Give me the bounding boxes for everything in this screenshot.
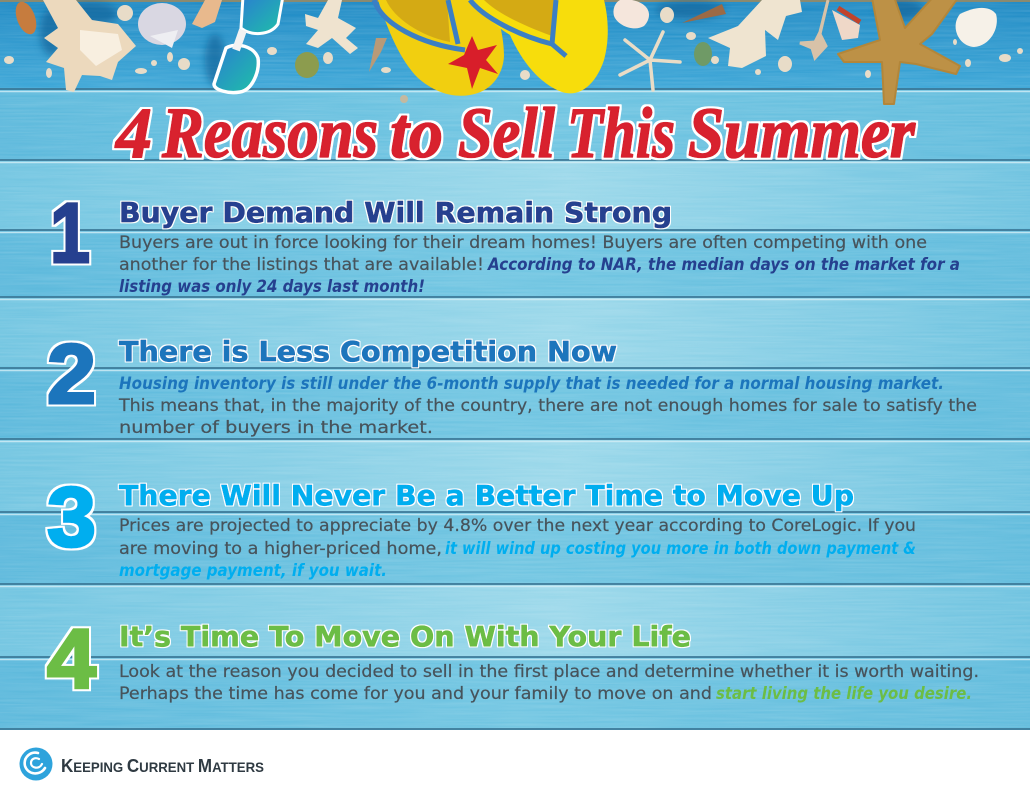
icon: white scallop shell right	[956, 8, 997, 47]
reason 2	[47, 327, 977, 437]
body 2: This means that, in the majority of the country, there are not enough homes for sale to satisfy the	[118, 396, 977, 415]
footer	[0, 731, 1030, 796]
body 2	[118, 374, 977, 437]
icon: spiral shell	[369, 38, 387, 72]
title: Sell	[458, 93, 555, 173]
icon: sunglasses	[214, 0, 283, 93]
icon: yellow flip-flops	[374, 0, 608, 96]
title: Summer	[688, 93, 916, 173]
icon: conch shell	[43, 0, 136, 92]
body 1: listing was only 24 days last month!	[119, 277, 425, 296]
reason 4	[47, 612, 979, 706]
body 3: are moving to a higher-priced home,	[119, 539, 442, 558]
body 2: number of buyers in the market.	[119, 418, 433, 437]
body 3	[119, 516, 916, 580]
number 3: 3	[47, 470, 96, 564]
body 3: Prices are projected to appreciate by 4.8% over the next year according to CoreLogic. If you	[119, 516, 916, 535]
icon: green shell right	[694, 42, 712, 66]
body 1: According to NAR, the median days on the market for a	[486, 255, 960, 274]
icon: thin starfish	[620, 32, 680, 90]
small pebbles	[4, 5, 1023, 103]
icon: white coral	[305, 0, 358, 54]
icon: large brown starfish	[838, 0, 960, 104]
heading 3: There Will Never Be a Better Time to Move Up	[119, 479, 854, 512]
icon: round pearl shell	[138, 3, 186, 48]
reason 3	[47, 470, 916, 580]
title: 4	[114, 93, 152, 173]
icon: Keeping Current Matters logo	[20, 748, 52, 780]
body 4: Perhaps the time has come for you and your family to move on and	[119, 684, 712, 703]
reason 1	[50, 186, 960, 296]
body 4	[119, 662, 979, 703]
icon: cream shell	[192, 0, 222, 28]
body 3: it will wind up costing you more in both down payment &	[445, 539, 916, 558]
number 4: 4	[47, 612, 96, 706]
body 1	[119, 233, 960, 296]
heading 4: It’s Time To Move On With Your Life	[119, 620, 691, 653]
body 1: another for the listings that are available!	[119, 255, 484, 274]
body 1: Buyers are out in force looking for their dream homes! Buyers are often competing with one	[119, 233, 927, 252]
body 4: start living the life you desire.	[716, 684, 972, 703]
heading 2: There is Less Competition Now	[119, 335, 617, 368]
number 1: 1	[50, 186, 90, 280]
icon: cone shell	[682, 4, 726, 23]
logo wordmark: KEEPING CURRENT MATTERS	[61, 756, 264, 776]
title: Reasons	[161, 93, 378, 173]
title: to	[390, 93, 443, 173]
body 3: mortgage payment, if you wait.	[119, 561, 387, 580]
title	[114, 93, 916, 173]
title: This	[567, 93, 675, 173]
icon: green shell	[295, 52, 319, 78]
icon: scallop shell	[613, 0, 649, 28]
body 4: Look at the reason you decided to sell in the first place and determine whether it is worth waiting.	[119, 662, 979, 681]
body 2: Housing inventory is still under the 6-month supply that is needed for a normal housing market.	[119, 374, 944, 393]
number 2: 2	[47, 327, 96, 421]
icon: spiked shell	[800, 0, 828, 58]
heading 1: Buyer Demand Will Remain Strong	[119, 196, 672, 229]
icon: small brown shell	[12, 0, 40, 37]
icon: large white coral	[708, 0, 802, 68]
icon: red-lined shell	[832, 10, 860, 40]
